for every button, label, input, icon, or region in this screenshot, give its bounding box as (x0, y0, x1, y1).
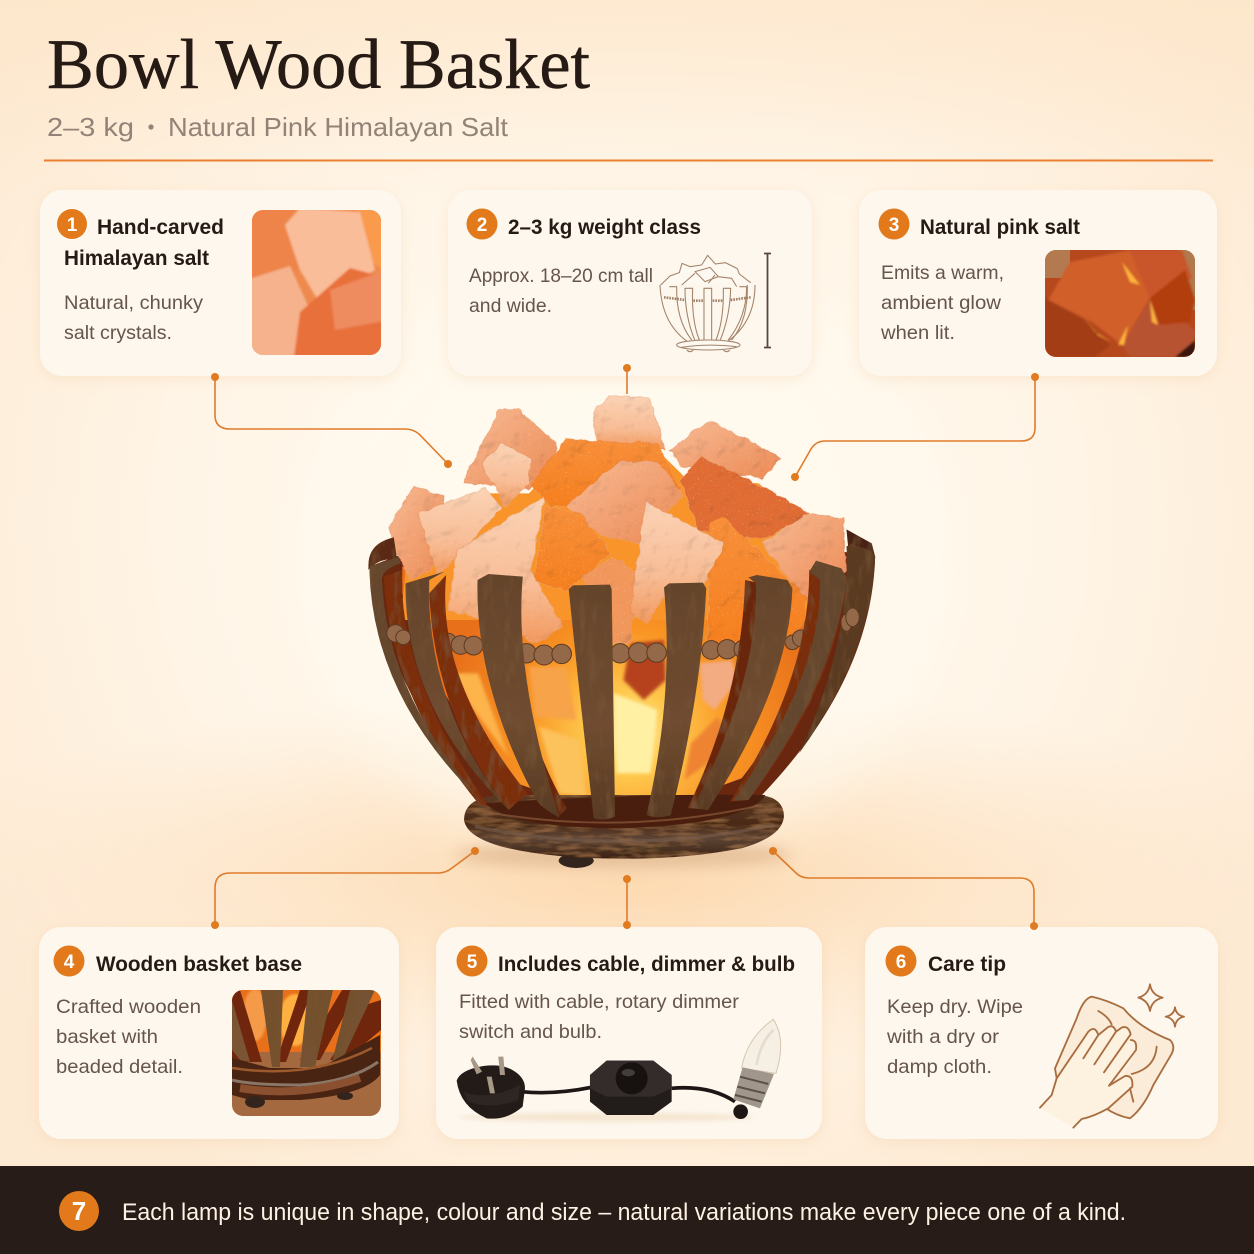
dimmer (590, 1061, 672, 1115)
footer bar (0, 1166, 1254, 1254)
connector 6 (769, 847, 1038, 930)
heading 4: Wooden basket base (96, 953, 302, 976)
cable (522, 1087, 735, 1102)
text 6: damp cloth. (887, 1056, 992, 1078)
connector 1 (211, 373, 452, 468)
badge 5 (456, 946, 488, 976)
heading 1: Hand-carved (97, 216, 224, 239)
panel 5: cable, dimmer and bulb (436, 927, 822, 1139)
heading 5: Includes cable, dimmer & bulb (498, 953, 795, 976)
badge 1: 1 (67, 215, 78, 236)
lower chunks visible through slats (455, 640, 738, 797)
icon: lamp line drawing (660, 255, 755, 352)
connector 4 (211, 847, 479, 929)
inner beads (439, 625, 821, 665)
panel 4: wooden basket base (39, 927, 399, 1139)
text 2 (469, 265, 653, 317)
salt crystals (389, 395, 846, 643)
panel 3: natural pink salt (859, 190, 1217, 376)
bulb (733, 1019, 781, 1119)
text 6: with a dry or (886, 1026, 1000, 1048)
icon: hand wiping with cloth (1040, 984, 1184, 1128)
outer beads (387, 608, 859, 645)
heading 6: Care tip (928, 953, 1006, 976)
badge 6: 6 (896, 952, 906, 973)
interior glow (402, 567, 808, 802)
base (464, 795, 784, 868)
badge 7: 7 (72, 1196, 86, 1226)
icon: height bar (764, 254, 771, 348)
photo: glowing salt (1045, 250, 1195, 357)
text 5: Fitted with cable, rotary dimmer (459, 991, 740, 1013)
text 4: basket with (56, 1026, 158, 1048)
text 2: and wide. (469, 295, 552, 317)
title: Bowl Wood Basket (47, 26, 590, 104)
heading 1 (64, 216, 224, 270)
panel 6: care tip (865, 927, 1218, 1139)
subtitle: Natural Pink Himalayan Salt (168, 112, 509, 142)
back rim (368, 529, 875, 570)
badge 4 (54, 946, 84, 976)
connector 5 (623, 875, 631, 929)
floor shadow (455, 842, 792, 868)
footer text: Each lamp is unique in shape, colour and size – natural variations make every piece one of a kind. (122, 1199, 1126, 1226)
text 1: Natural, chunky (64, 292, 203, 314)
text 5: switch and bulb. (459, 1021, 602, 1043)
text 3: Emits a warm, (881, 262, 1004, 284)
panel 2: weight class (448, 190, 812, 376)
badge 2: 2 (477, 215, 487, 236)
badge 3 (878, 208, 910, 240)
text 1: salt crystals. (64, 322, 172, 344)
wooden slats (369, 543, 875, 820)
photo: basket base (232, 989, 381, 1116)
badge 3: 3 (889, 215, 899, 236)
text 4: Crafted wooden (56, 996, 201, 1018)
text 6: Keep dry. Wipe (887, 996, 1023, 1018)
plug (457, 1057, 525, 1119)
badge 6 (886, 946, 916, 976)
text 5 (459, 991, 740, 1043)
badge 4: 4 (64, 952, 75, 973)
text 1 (64, 292, 203, 344)
text 6 (886, 996, 1023, 1078)
illustration: plug, dimmer and bulb (457, 1019, 781, 1122)
panel 1: hand-carved salt (40, 190, 401, 376)
connector lines from callouts to lamp (211, 364, 1039, 930)
photo: salt crystals close-up (252, 210, 381, 355)
lamp: salt crystals in a wooden bowl basket (368, 395, 875, 868)
connector 2 (623, 364, 631, 394)
text 2: Approx. 18–20 cm tall (469, 265, 653, 287)
badge 2 (466, 208, 498, 240)
crystal backdrop (401, 443, 833, 620)
badge 1 (57, 209, 87, 239)
badge 7 (59, 1191, 99, 1231)
text 4 (56, 996, 201, 1078)
header rule (44, 160, 1213, 162)
subtitle: 2–3 kg (47, 112, 134, 142)
bowl backing (369, 547, 875, 805)
text 3 (880, 262, 1004, 344)
text 3: ambient glow (881, 292, 1002, 314)
badge 5: 5 (467, 952, 478, 973)
text 4: beaded detail. (56, 1056, 183, 1078)
heading 1: Himalayan salt (64, 247, 209, 270)
heading 2: 2–3 kg weight class (508, 216, 701, 239)
heading 3: Natural pink salt (920, 216, 1080, 239)
text 3: when lit. (880, 322, 955, 344)
connector 3 (791, 373, 1039, 481)
